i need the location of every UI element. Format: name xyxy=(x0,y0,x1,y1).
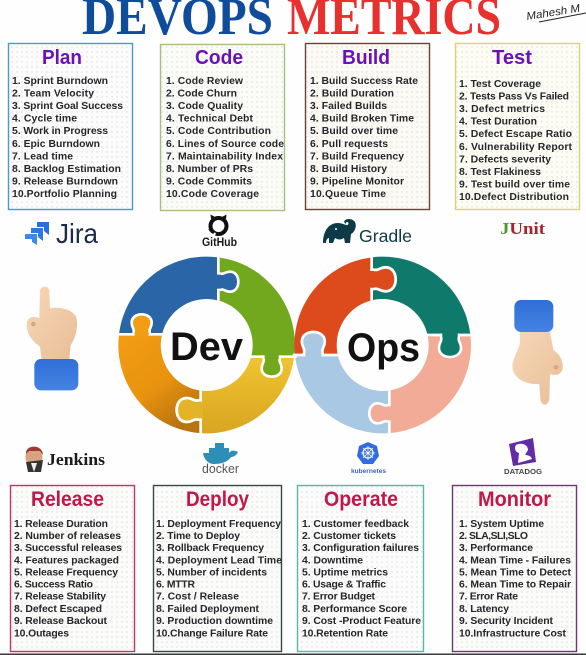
list: Test metrics xyxy=(459,79,573,203)
list: Build metrics: 3. Failed Builds xyxy=(310,101,387,112)
heading: Test: Test xyxy=(492,47,532,69)
list: Build metrics: 6. Pull requests xyxy=(310,139,388,150)
title xyxy=(82,0,501,46)
list: Operate metrics: 10.Retention Rate xyxy=(302,628,388,640)
list: Operate metrics: 5. Uptime metrics xyxy=(302,567,388,578)
list: Release metrics: 8. Defect Escaped xyxy=(14,604,102,615)
panel: Build xyxy=(306,44,430,210)
list: Release metrics: 6. Success Ratio xyxy=(14,580,93,590)
icon: Datadog logo: DATADOG xyxy=(504,469,543,476)
heading: Code: Code xyxy=(195,47,243,69)
panel: Release xyxy=(10,486,134,652)
list: Test metrics: 9. Test build over time xyxy=(459,179,570,190)
list: Release metrics: 7. Release Stability xyxy=(14,592,106,602)
list: Code metrics: 6. Lines of Source code xyxy=(166,139,284,150)
list: Monitor metrics: 3. Performance xyxy=(459,543,533,554)
list: Code metrics: 4. Technical Debt xyxy=(166,114,254,125)
list: Plan metrics xyxy=(12,76,123,200)
list: Build metrics: 9. Pipeline Monitor xyxy=(310,176,404,187)
Ops piece: red xyxy=(294,257,372,355)
list: Plan metrics: 5. Work in Progress xyxy=(12,126,108,137)
list: Code metrics: 3. Code Quality xyxy=(166,101,243,112)
icon: Gradle logo xyxy=(323,219,412,246)
list: Build metrics: 2. Build Duration xyxy=(310,88,394,100)
list: Release metrics: 3. Successful releases xyxy=(14,543,122,554)
tab: light blue xyxy=(302,332,325,357)
panel: Plan xyxy=(8,44,132,210)
icon: left hand pointing up xyxy=(27,287,78,390)
list: Monitor metrics: 1. System Uptime xyxy=(459,519,544,530)
list: Operate metrics: 3. Configuration failures xyxy=(302,543,419,554)
list: Deploy metrics: 3. Rollback Frequency xyxy=(156,543,264,554)
list: Deploy metrics: 6. MTTR xyxy=(156,580,195,590)
Dev piece: orange xyxy=(118,334,201,433)
list: Deploy metrics: 8. Failed Deployment xyxy=(156,604,260,615)
panel: Monitor xyxy=(452,486,576,652)
icon: right hand pointing down xyxy=(512,300,563,405)
list: Monitor metrics: 6. Mean Time to Repair xyxy=(459,580,571,590)
list: Test metrics: 1. Test Coverage xyxy=(459,79,541,90)
heading: Deploy: Deploy xyxy=(186,488,249,511)
label: Dev: Dev xyxy=(170,325,244,369)
list: Release metrics: 2. Number of releases xyxy=(14,531,121,542)
tab: orange xyxy=(132,314,152,337)
list: Monitor metrics xyxy=(459,519,572,640)
list: Release metrics: 10.Outages xyxy=(14,628,69,640)
tab: teal xyxy=(439,333,461,357)
icon: JUnit logo: JUnit xyxy=(500,219,545,238)
list: Monitor metrics: 2. SLA,SLI,SLO xyxy=(459,531,528,542)
list: Code metrics: 8. Number of PRs xyxy=(166,164,253,175)
list: Plan metrics: 4. Cycle time xyxy=(12,114,77,125)
icon: Jira logo: Jira xyxy=(56,218,98,249)
author signature: Mahesh M xyxy=(526,3,582,23)
list: Operate metrics: 8. Performance Score xyxy=(302,604,407,615)
list: Deploy metrics xyxy=(156,519,282,640)
icon: Gradle logo: Gradle xyxy=(359,226,412,246)
list: Plan metrics: 3. Sprint Goal Success xyxy=(12,101,123,112)
heading: Build: Build xyxy=(342,47,390,69)
list: Plan metrics: 6. Epic Burndown xyxy=(12,139,100,150)
Ops piece: salmon xyxy=(389,335,471,433)
list: Operate metrics: 2. Customer tickets xyxy=(302,531,396,542)
tab: red xyxy=(369,267,396,291)
panel: Deploy xyxy=(154,486,282,652)
tab: yellow xyxy=(177,398,203,422)
list: Code metrics: 2. Code Churn xyxy=(166,88,237,100)
list: Release metrics: 1. Release Duration xyxy=(14,519,108,530)
Dev piece: yellow xyxy=(201,357,294,433)
list: Code metrics xyxy=(166,76,284,200)
list: Build metrics: 4. Build Broken Time xyxy=(310,114,414,125)
icon: Kubernetes logo xyxy=(351,442,386,475)
list: Monitor metrics: 10.Infrastructure Cost xyxy=(459,628,567,640)
list: Monitor metrics: 9. Security Incident xyxy=(459,616,554,627)
list: Monitor metrics: 7. Error Rate xyxy=(459,592,518,602)
list: Deploy metrics: 1. Deployment Frequency xyxy=(156,519,281,530)
list: Deploy metrics: 7. Cost / Release xyxy=(156,592,239,602)
list: Test metrics: 7. Defects severity xyxy=(459,154,551,165)
list: Operate metrics: 1. Customer feedback xyxy=(302,519,409,530)
icon: Datadog logo xyxy=(504,438,543,476)
list: Build metrics: 8. Build History xyxy=(310,164,387,175)
list: Build metrics: 7. Build Frequency xyxy=(310,151,404,162)
Dev piece: green xyxy=(218,257,295,357)
list: Deploy metrics: 2. Time to Deploy xyxy=(156,531,240,542)
list: Build metrics: 1. Build Success Rate xyxy=(310,76,418,87)
icon: Jenkins logo xyxy=(26,447,105,472)
list: Plan metrics: 7. Lead time xyxy=(12,151,73,162)
list: Release metrics: 5. Release Frequency xyxy=(14,567,118,578)
panel: Operate xyxy=(298,486,424,652)
heading: Plan: Plan xyxy=(42,47,82,69)
list: Test metrics: 4. Test Duration xyxy=(459,117,537,128)
list: Deploy metrics: 10.Change Failure Rate xyxy=(156,628,268,640)
icon: Docker logo: docker xyxy=(202,461,240,476)
icon: Docker logo xyxy=(202,443,240,476)
heading: Operate: Operate xyxy=(324,488,398,511)
list: Code metrics: 1. Code Review xyxy=(166,76,244,87)
infinity puzzle diagram xyxy=(117,255,473,435)
list: Operate metrics: 7. Error Budget xyxy=(302,592,376,602)
list: Release metrics: 9. Release Backout xyxy=(14,616,108,627)
tab: green xyxy=(262,354,282,377)
Dev piece: blue xyxy=(119,257,218,334)
panel: Test xyxy=(456,44,580,210)
icon: Jira logo xyxy=(25,218,98,249)
label: Ops: Ops xyxy=(347,326,420,370)
icon: Kubernetes logo: kubernetes xyxy=(351,468,386,475)
list: Test metrics: 8. Test Flakiness xyxy=(459,167,541,178)
list: Deploy metrics: 9. Production downtime xyxy=(156,616,273,627)
list: Build metrics: 10.Queue Time xyxy=(310,189,386,200)
list: Code metrics: 10.Code Coverage xyxy=(166,189,259,200)
list: Plan metrics: 2. Team Velocity xyxy=(12,88,94,100)
icon: GitHub logo: GitHub xyxy=(202,237,237,249)
list: Deploy metrics: 5. Number of incidents xyxy=(156,567,267,578)
list: Test metrics: 10.Defect Distribution xyxy=(459,192,569,203)
list: Test metrics: 3. Defect metrics xyxy=(459,104,545,115)
list: Code metrics: 5. Code Contribution xyxy=(166,126,271,137)
tab: salmon xyxy=(369,403,392,423)
heading: Monitor: Monitor xyxy=(478,488,551,511)
list: Operate metrics: 4. Downtime xyxy=(302,555,363,566)
list: Release metrics: 4. Features packaged xyxy=(14,555,119,566)
list: Deploy metrics: 4. Deployment Lead Time xyxy=(156,555,282,566)
list: Test metrics: 5. Defect Escape Ratio xyxy=(459,129,572,140)
tab: blue xyxy=(216,272,238,292)
icon: GitHub logo xyxy=(202,214,237,249)
list: Test metrics: 6. Vulnerability Report xyxy=(459,142,573,153)
list: Monitor metrics: 4. Mean Time - Failures xyxy=(459,555,571,566)
list: Code metrics: 7. Maintainability Index xyxy=(166,151,283,162)
list: Operate metrics: 6. Usage & Traffic xyxy=(302,580,386,590)
list: Plan metrics: 10.Portfolio Planning xyxy=(12,189,117,200)
list: Plan metrics: 8. Backlog Estimation xyxy=(12,164,121,175)
list: Test metrics: 2. Tests Pass Vs Failed xyxy=(459,92,569,102)
list: Monitor metrics: 8. Latency xyxy=(459,604,509,615)
list: Release metrics xyxy=(14,519,122,640)
panel: Code xyxy=(160,44,284,210)
heading: Release: Release xyxy=(31,488,104,511)
Ops piece: light blue xyxy=(295,355,389,433)
list: Operate metrics: 9. Cost -Product Feature xyxy=(302,616,421,627)
icon: Jenkins logo: Jenkins xyxy=(47,450,105,469)
list: Build metrics: 5. Build over time xyxy=(310,126,398,137)
list: Plan metrics: 9. Release Burndown xyxy=(12,176,118,187)
list: Plan metrics: 1. Sprint Burndown xyxy=(12,76,108,87)
list: Build metrics xyxy=(310,76,418,200)
list: Code metrics: 9. Code Commits xyxy=(166,176,252,187)
list: Monitor metrics: 5. Mean Time to Detect xyxy=(459,567,572,578)
Ops piece: teal xyxy=(372,257,470,335)
list: Operate metrics xyxy=(302,519,421,640)
